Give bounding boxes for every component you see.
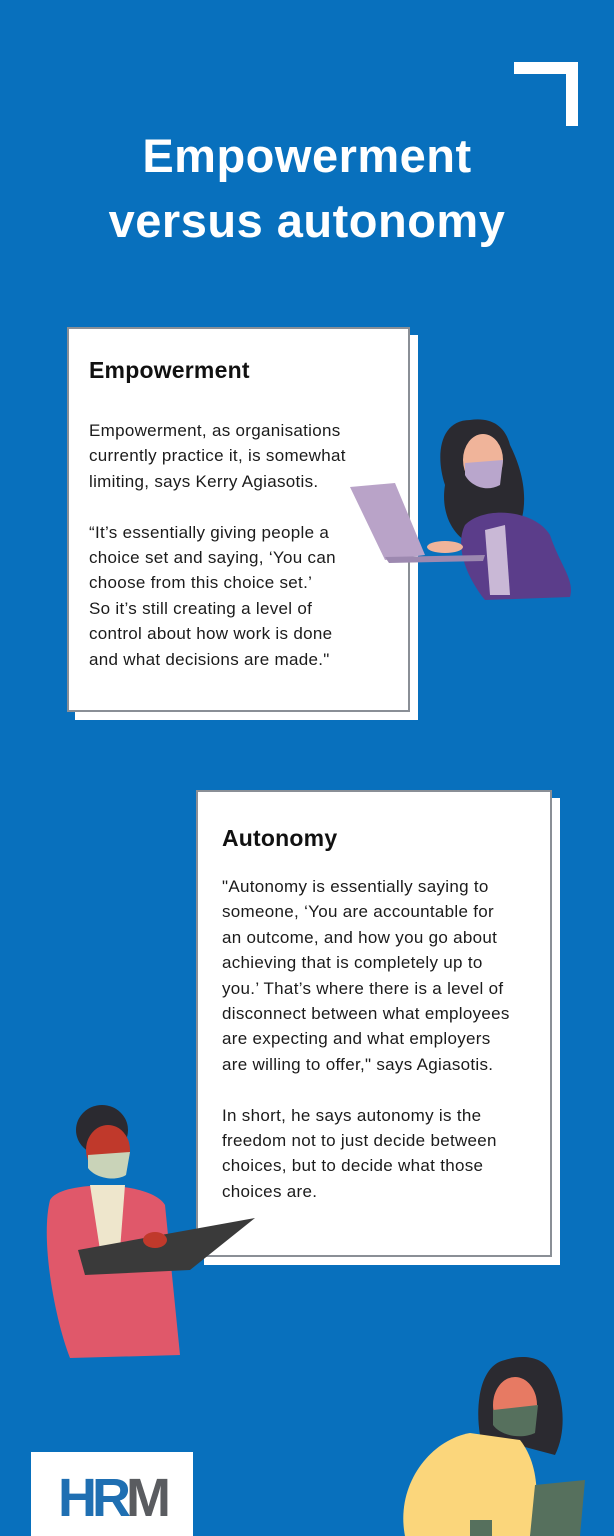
- title: [108, 129, 505, 247]
- text: empowerment body: choose from this choice set.’: [89, 573, 312, 592]
- text: autonomy body: are willing to offer," says Agiasotis.: [222, 1055, 493, 1074]
- text: autonomy body: disconnect between what employees: [222, 1004, 510, 1023]
- text: empowerment body: Empowerment, as organisations: [89, 421, 341, 440]
- text: autonomy body: you.’ That’s where there is a level of: [222, 979, 503, 998]
- logo: HRM: HRM: [58, 1468, 166, 1528]
- heading: empowerment: Empowerment: [89, 357, 250, 383]
- illustration: woman with coffee and laptop: [403, 1357, 585, 1536]
- corner bracket: [514, 62, 578, 126]
- illustration: woman with laptop: [350, 419, 571, 600]
- text: autonomy body: an outcome, and how you go about: [222, 928, 497, 947]
- text: autonomy body: [222, 877, 510, 1201]
- title: versus autonomy: [109, 194, 505, 247]
- text: autonomy body: freedom not to just decide between: [222, 1131, 497, 1150]
- text: autonomy body: are expecting and what employers: [222, 1029, 491, 1048]
- text: autonomy body: choices are.: [222, 1182, 317, 1201]
- text: autonomy body: someone, ‘You are accountable for: [222, 902, 494, 921]
- text: empowerment body: choice set and saying, ‘You can: [89, 548, 336, 567]
- text: autonomy body: choices, but to decide what those: [222, 1156, 483, 1175]
- panel: autonomy: [196, 790, 560, 1265]
- text: autonomy body: "Autonomy is essentially saying to: [222, 877, 489, 896]
- text: autonomy body: achieving that is completely up to: [222, 953, 483, 972]
- text: empowerment body: currently practice it, is somewhat: [89, 446, 346, 465]
- text: empowerment body: control about how work is done: [89, 624, 332, 643]
- text: empowerment body: and what decisions are made.": [89, 650, 330, 669]
- text: autonomy body: In short, he says autonomy is the: [222, 1106, 481, 1125]
- illustration: woman with folder: [46, 1105, 255, 1358]
- text: empowerment body: “It’s essentially giving people a: [89, 523, 329, 542]
- text: empowerment body: limiting, says Kerry Agiasotis.: [89, 472, 318, 491]
- text: empowerment body: [89, 421, 346, 669]
- title: Empowerment: [142, 129, 472, 182]
- logo: HRM: [31, 1452, 193, 1536]
- text: empowerment body: So it’s still creating a level of: [89, 599, 312, 618]
- heading: autonomy: Autonomy: [222, 825, 337, 851]
- panel: empowerment: [67, 327, 418, 720]
